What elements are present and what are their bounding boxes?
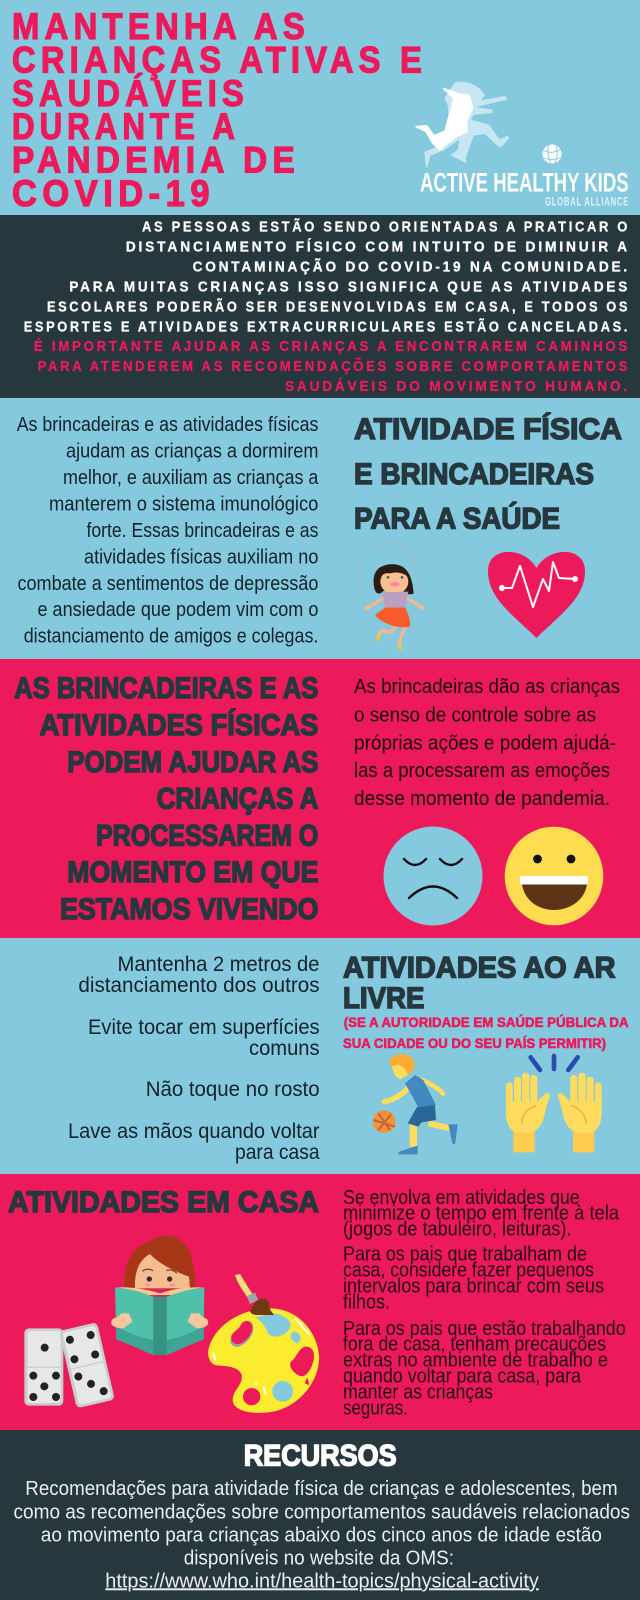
icon: globe [542, 144, 562, 164]
outdoor note [343, 1013, 629, 1051]
heading: processing emotions: PROCESSAREM O [96, 820, 318, 852]
outdoor note: (SE A AUTORIDADE EM SAÚDE PÚBLICA DA [344, 1013, 629, 1030]
activities at home text: quando voltar para casa, para [343, 1365, 582, 1387]
heading: outdoor activities: ATIVIDADES AO AR [343, 951, 616, 984]
activities at home text: Para os pais que trabalham de [343, 1244, 587, 1266]
physical activity text: forte. Essas brincadeiras e as [86, 520, 318, 542]
intro highlight [34, 338, 630, 395]
icon: running children [416, 82, 508, 167]
activities at home text: extras no ambiente de trabalho e [343, 1350, 608, 1372]
panel: outdoor activities [0, 938, 640, 1174]
icon: heart with pulse [488, 552, 585, 638]
heading: processing emotions: AS BRINCADEIRAS E AS [14, 672, 318, 705]
activities at home text: seguras. [343, 1397, 408, 1419]
heading: activities at home: ATIVIDADES EM CASA [8, 1186, 319, 1219]
resources text [14, 1478, 630, 1592]
title: DURANTE A [12, 105, 240, 147]
title: MANTENHA AS [12, 5, 310, 47]
outdoor note: SUA CIDADE OU DO SEU PAÍS PERMITIR) [343, 1035, 606, 1051]
processing emotions text: próprias ações e podem ajudá- [354, 732, 616, 754]
resources text: Recomendações para atividade física de crianças e adolescentes, bem [25, 1478, 618, 1500]
activities at home text: minimize o tempo em frente à tela [343, 1203, 620, 1225]
icon: girl skipping rope [361, 543, 424, 650]
heading: processing emotions: ESTAMOS VIVENDO [60, 893, 318, 926]
physical activity text: atividades físicas auxiliam no [84, 546, 318, 568]
panel: header background [0, 0, 640, 215]
physical activity text: manterem o sistema imunológico [49, 493, 318, 515]
icon: boy with basketball [373, 1054, 458, 1154]
icon: child reading book [111, 1236, 208, 1355]
outdoor guidance text: para casa [235, 1141, 320, 1164]
activities at home text: Se envolva em atividades que [343, 1187, 580, 1209]
panel: processing emotions [0, 659, 640, 938]
physical activity text: ajudam as crianças a dormirem [66, 440, 318, 462]
processing emotions text: desse momento de pandemia. [354, 788, 610, 810]
physical activity text: distanciamento de amigos e colegas. [24, 626, 318, 648]
processing emotions text: o senso de controle sobre as [354, 704, 596, 726]
title: SAUDÁVEIS [12, 72, 249, 114]
activities at home text: manter as crianças [343, 1381, 493, 1403]
icon: paint palette [208, 1274, 319, 1413]
heading: physical activity: E BRINCADEIRAS [354, 458, 594, 491]
outdoor guidance text: Mantenha 2 metros de [118, 953, 320, 976]
outdoor guidance text: Lave as mãos quando voltar [68, 1120, 320, 1143]
heading: processing emotions [14, 672, 318, 926]
physical activity text: e ansiedade que podem vim com o [38, 599, 318, 621]
outdoor guidance text [68, 953, 320, 1164]
icon: happy face [505, 827, 603, 925]
panel: physical activity [0, 398, 640, 659]
panel: intro [0, 215, 640, 398]
logo: Active Healthy Kids [416, 82, 629, 209]
outdoor guidance text: Não toque no rosto [146, 1078, 320, 1101]
title: CRIANÇAS ATIVAS E [12, 38, 427, 80]
heading: processing emotions: ATIVIDADES FÍSICAS [40, 708, 318, 742]
heading: physical activity [354, 412, 622, 536]
icon: right hand [558, 1073, 602, 1152]
activities at home text: casa, considere fazer pequenos [343, 1260, 594, 1282]
icon: left hand [506, 1073, 550, 1152]
icon: raised hands [506, 1056, 602, 1152]
heading: physical activity: PARA A SAÚDE [354, 502, 560, 536]
physical activity text: combate a sentimentos de depressão [18, 573, 318, 595]
outdoor guidance text: distanciamento dos outros [78, 974, 320, 997]
heading: processing emotions: CRIANÇAS A [157, 783, 318, 816]
icon: dominoes [24, 1322, 115, 1408]
heading: physical activity: ATIVIDADE FÍSICA [354, 412, 622, 446]
title: PANDEMIA DE [12, 139, 300, 181]
activities at home text [343, 1187, 626, 1419]
activities at home text: (jogos de tabuleiro, leituras). [343, 1219, 571, 1241]
heading: outdoor activities: LIVRE [343, 982, 424, 1015]
activities at home text: fora de casa, tenham precauções [343, 1334, 606, 1356]
heading: resources: RECURSOS [244, 1440, 397, 1473]
resources text: https://www.who.int/health-topics/physical-activity [105, 1570, 539, 1592]
activities at home text: filhos. [343, 1291, 390, 1313]
physical activity text [17, 414, 319, 648]
title [12, 5, 427, 214]
processing emotions text: As brincadeiras dão as crianças [354, 676, 620, 698]
outdoor guidance text: comuns [249, 1037, 320, 1060]
processing emotions text [354, 676, 620, 810]
activities at home text: intervalos para brincar com seus [343, 1276, 604, 1298]
heading: processing emotions: MOMENTO EM QUE [67, 856, 318, 889]
heading: processing emotions: PODEM AJUDAR AS [67, 746, 318, 779]
outdoor guidance text: Evite tocar em superfícies [88, 1016, 320, 1039]
intro text [24, 218, 630, 335]
resources text: ao movimento para crianças abaixo dos cinco anos de idade estão [41, 1524, 602, 1546]
panel: activities at home [0, 1174, 640, 1430]
resources text: disponíveis no website da OMS: [184, 1547, 454, 1569]
title: COVID-19 [12, 172, 215, 214]
processing emotions text: las a processarem as emoções [354, 760, 610, 782]
panel: resources [0, 1430, 640, 1600]
physical activity text: As brincadeiras e as atividades físicas [17, 414, 318, 436]
heading: outdoor activities [343, 951, 616, 1015]
physical activity text: melhor, e auxiliam as crianças a [63, 467, 319, 489]
icon: sad face [384, 826, 482, 926]
